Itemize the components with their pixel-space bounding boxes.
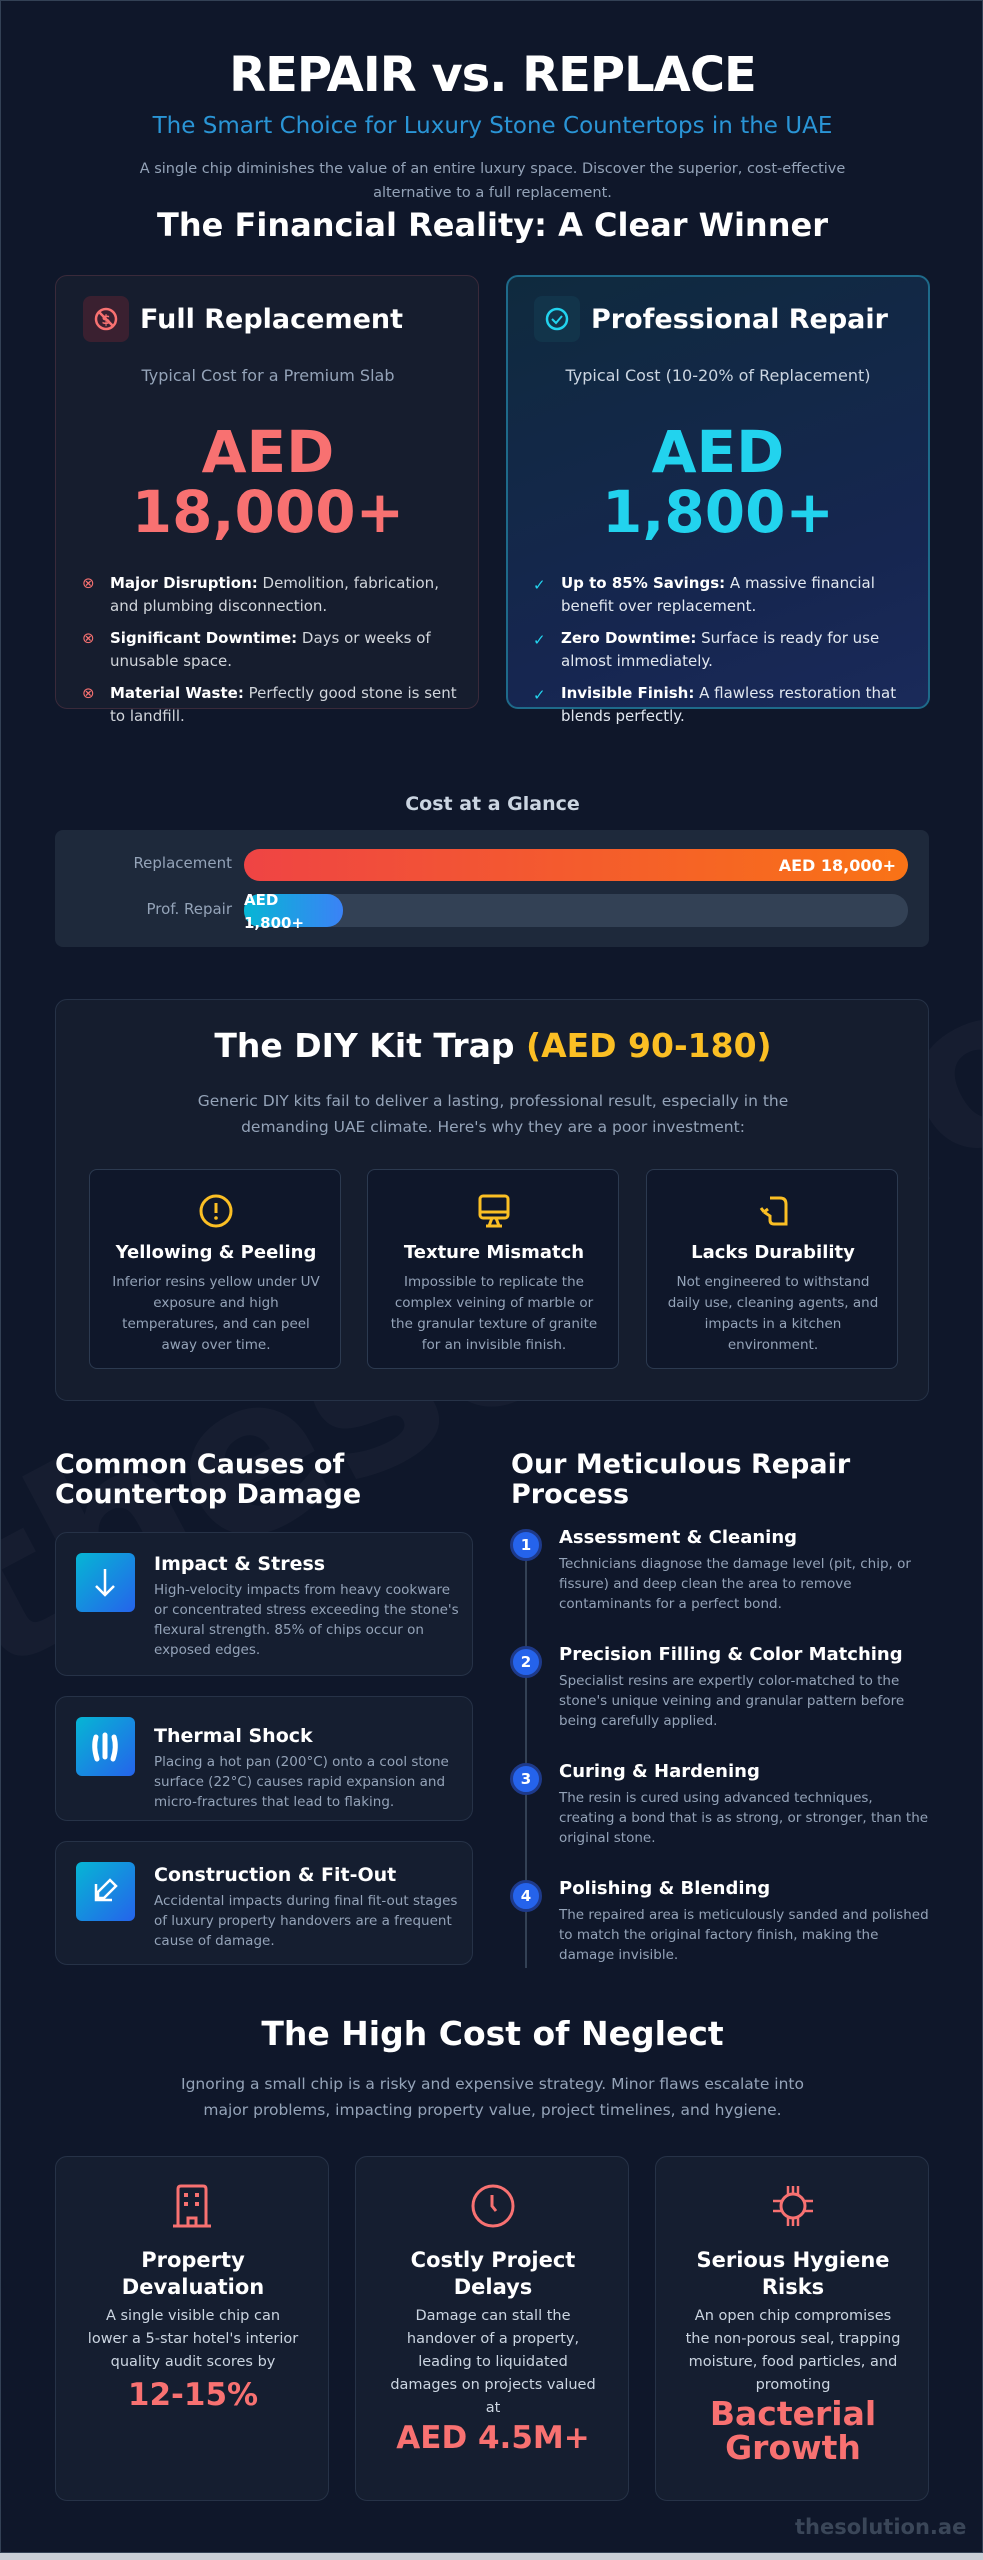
list: Material Waste: Perfectly good stone is sent — [110, 684, 457, 702]
timeline: repair process: The repaired area is meticulously sanded and polished to match the original factory finish, making the damage invisible. — [559, 1907, 929, 1963]
big number — [602, 418, 834, 546]
timeline: repair process: Assessment & Cleaning — [559, 1527, 797, 1548]
card: project delays: at — [486, 2400, 500, 2416]
heading: common causes: Common Causes of — [55, 1449, 344, 1480]
card: durability — [646, 1169, 898, 1369]
card: hygiene risks: promoting — [756, 2377, 830, 2393]
card: project delays: damages on projects valued — [390, 2377, 596, 2393]
list: Major Disruption: Demolition, fabrication, — [110, 574, 439, 592]
card: project delays: Delays — [454, 2275, 532, 2299]
list: and plumbing disconnection. — [110, 597, 327, 615]
card: hygiene risks: Risks — [762, 2275, 824, 2299]
step 2 — [510, 1644, 904, 1729]
bar chart: AED 18,000+ — [779, 856, 896, 875]
card: yellowing: Yellowing & Peeling — [116, 1242, 316, 1263]
list: Up to 85% Savings: A massive financial — [561, 574, 875, 592]
card: durability: Lacks Durability — [691, 1242, 855, 1263]
heading: cost at a glance: Cost at a Glance — [405, 793, 580, 815]
heading: repair process — [511, 1449, 850, 1510]
big number: AED — [202, 418, 334, 486]
card: hygiene risks: the non-porous seal, trapping — [686, 2331, 900, 2347]
timeline: repair process: 4 — [521, 1887, 531, 1905]
heading: common causes: Countertop Damage — [55, 1479, 361, 1510]
heading: The DIY Kit Trap (AED 90-180) — [214, 1026, 772, 1065]
card heading: Full Replacement — [140, 304, 403, 335]
cause: construction: Construction & Fit-Out — [154, 1864, 396, 1886]
card: property devaluation: Devaluation — [122, 2275, 264, 2299]
card: property devaluation: lower a 5-star hotel's interior — [88, 2331, 298, 2347]
cause: thermal: Thermal Shock — [154, 1725, 313, 1747]
big number: 1,800+ — [602, 478, 834, 546]
cause: construction: Accidental impacts during final fit-out stages of luxury property handovers are a frequent cause of damage. — [154, 1893, 457, 1949]
card: property devaluation — [55, 2156, 329, 2501]
list: ⊗ — [82, 684, 95, 702]
timeline: repair process: Polishing & Blending — [559, 1878, 770, 1899]
bar chart: AED — [244, 891, 278, 909]
title: REPAIR vs. REPLACE — [229, 47, 756, 103]
card: texture: Impossible to replicate the complex veining of marble or the granular texture of granite for an invisible finish. — [391, 1274, 597, 1353]
list: ⊗ — [82, 629, 95, 647]
timeline: repair process: 1 — [521, 1536, 531, 1554]
list: Invisible Finish: A flawless restoration that — [561, 684, 896, 702]
step 1 — [510, 1527, 911, 1612]
card: hygiene risks: An open chip compromises — [695, 2308, 891, 2324]
label: Typical Cost (10-20% of Replacement) — [565, 366, 871, 385]
timeline: repair process: Technicians diagnose the damage level (pit, chip, or fissure) and deep clean the area to remove contaminants for a perfect bond. — [559, 1556, 911, 1612]
card: yellowing: Inferior resins yellow under UV exposure and high temperatures, and can peel away over time. — [112, 1274, 320, 1353]
subtitle: The Smart Choice for Luxury Stone Countertops in the UAE — [153, 113, 832, 139]
card: property devaluation: 12-15% — [128, 2377, 258, 2413]
heading: cost of neglect: The High Cost of Neglect — [261, 2014, 724, 2053]
bar chart: 1,800+ — [244, 914, 304, 932]
cause: impact: High-velocity impacts from heavy cookware or concentrated stress exceeding the stone's flexural strength. 85% of chips occur on exposed edges. — [154, 1582, 459, 1658]
heading: repair process: Process — [511, 1479, 629, 1510]
list: to landfill. — [110, 707, 185, 725]
card: project delays: Costly Project — [411, 2248, 575, 2272]
neglect text: Ignoring a small chip is a risky and expensive strategy. Minor flaws escalate into major problems, impacting property value, project timelines, and hygiene. — [181, 2075, 804, 2119]
card: project delays: AED 4.5M+ — [396, 2420, 590, 2456]
card: yellowing — [89, 1169, 341, 1369]
cause: thermal: Placing a hot pan (200°C) onto a cool stone surface (22°C) causes rapid expansion and micro-fractures that lead to flaking. — [154, 1754, 449, 1810]
cause: construction — [55, 1841, 473, 1965]
timeline: repair process: The resin is cured using advanced techniques, creating a bond that is as strong, or stronger, than the original stone. — [559, 1790, 928, 1846]
card: hygiene risks: moisture, food particles, and — [689, 2354, 897, 2370]
step 4 — [510, 1878, 929, 1963]
timeline: repair process: Curing & Hardening — [559, 1761, 760, 1782]
big number — [132, 418, 404, 546]
list: blends perfectly. — [561, 707, 685, 725]
card heading: Professional Repair — [591, 304, 888, 335]
heading: common causes — [55, 1449, 361, 1510]
list: ✓ — [533, 686, 546, 704]
heading: repair process: Our Meticulous Repair — [511, 1449, 850, 1480]
list: Zero Downtime: Surface is ready for use — [561, 629, 879, 647]
big number: AED — [652, 418, 784, 486]
cause: impact: Impact & Stress — [154, 1553, 325, 1575]
list: ✓ — [533, 631, 546, 649]
card: durability: Not engineered to withstand daily use, cleaning agents, and impacts in a kitchen environment. — [668, 1274, 878, 1353]
timeline: repair process: Specialist resins are expertly color-matched to the stone's unique veining and granular pattern before being carefully applied. — [559, 1673, 904, 1729]
icon: no sign — [83, 296, 129, 342]
list — [533, 574, 896, 725]
card: hygiene risks: Serious Hygiene — [696, 2248, 890, 2272]
panel: DIY kit trap — [55, 999, 929, 1401]
card: hygiene risks — [655, 2156, 929, 2501]
card: project delays — [355, 2156, 629, 2501]
list: almost immediately. — [561, 652, 713, 670]
list: benefit over replacement. — [561, 597, 756, 615]
card: hygiene risks: Growth — [725, 2428, 861, 2467]
panel: full replacement — [55, 275, 479, 709]
card: texture — [367, 1169, 619, 1369]
timeline: repair process — [510, 1527, 929, 1968]
cause: impact — [55, 1532, 473, 1676]
card: property devaluation: Property — [141, 2248, 245, 2272]
list: unusable space. — [110, 652, 232, 670]
icon: no sign: $ — [101, 313, 111, 328]
timeline: repair process: 2 — [521, 1653, 531, 1671]
label: Typical Cost for a Premium Slab — [142, 366, 394, 385]
list: Significant Downtime: Days or weeks of — [110, 629, 431, 647]
card: project delays: handover of a property, — [407, 2331, 579, 2347]
bar chart: Prof. Repair — [146, 900, 232, 918]
step 3 — [510, 1761, 928, 1846]
heading: financial reality: The Financial Reality: A Clear Winner — [157, 206, 828, 244]
list: ✓ — [533, 576, 546, 594]
list — [82, 574, 457, 725]
bar chart — [55, 830, 929, 947]
text: Generic DIY kits fail to deliver a lasting, professional result, especially in the demanding UAE climate. Here's why they are a poor investment: — [198, 1092, 788, 1136]
timeline: repair process: 3 — [521, 1770, 531, 1788]
card: texture: Texture Mismatch — [404, 1242, 584, 1263]
card: project delays: leading to liquidated — [418, 2354, 568, 2370]
icon: check circle — [534, 296, 580, 342]
card: hygiene risks: Bacterial — [710, 2394, 876, 2433]
intro text: A single chip diminishes the value of an entire luxury space. Discover the superior, cost-effective alternative to a full replacement. — [140, 161, 845, 201]
card: project delays: Damage can stall the — [415, 2308, 571, 2324]
timeline: repair process: Precision Filling & Color Matching — [559, 1644, 903, 1665]
footer: brand: thesolution.ae — [795, 2515, 966, 2539]
cause: thermal — [55, 1696, 473, 1821]
big number: 18,000+ — [132, 478, 404, 546]
list: ⊗ — [82, 574, 95, 592]
card: property devaluation: A single visible chip can — [106, 2308, 280, 2324]
bar chart: Replacement — [133, 854, 232, 872]
panel: professional repair — [506, 275, 930, 709]
card: property devaluation: quality audit scores by — [111, 2354, 275, 2370]
